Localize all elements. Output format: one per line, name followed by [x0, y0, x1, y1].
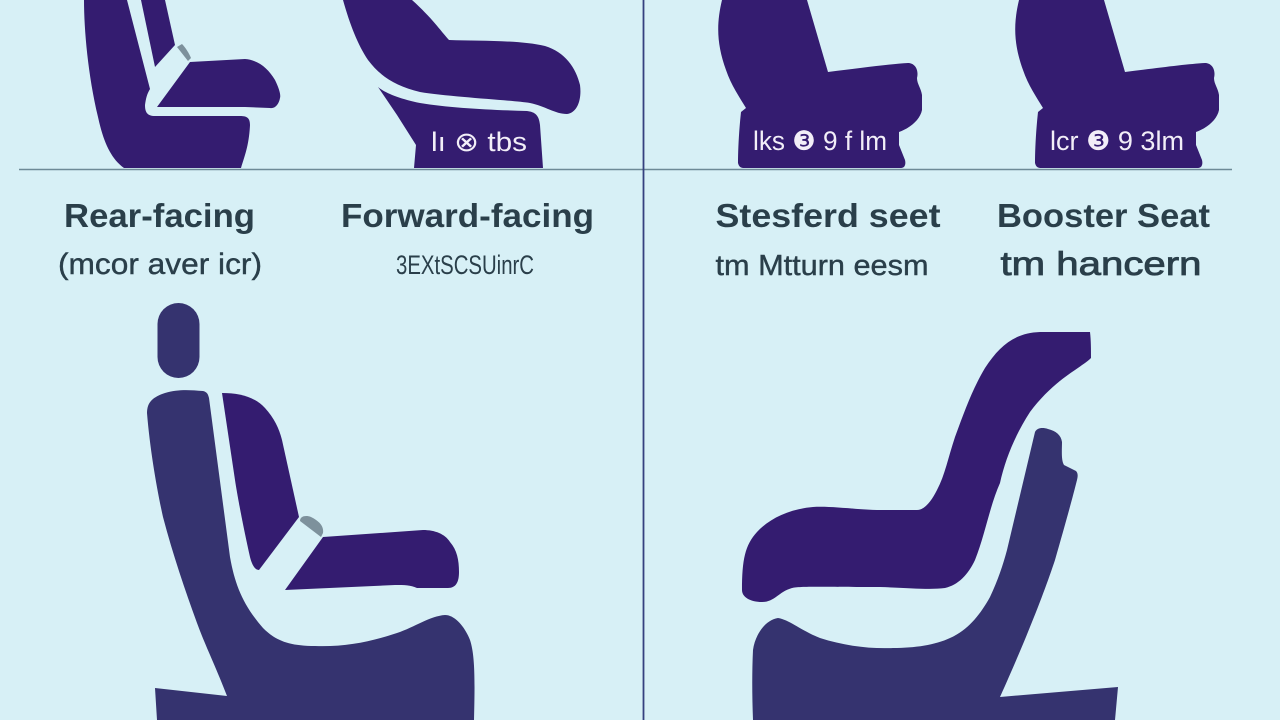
seat shell	[752, 428, 1118, 720]
caption: rear-facing: (mcor aver icr)	[58, 248, 262, 281]
caption: booster seat: tm hancern	[1000, 245, 1202, 282]
seat cushion	[285, 530, 459, 590]
icon: standard seat	[718, 0, 922, 168]
caption: standard seat: tm Mtturn eesm	[716, 250, 928, 282]
icon: booster seat	[1015, 0, 1219, 168]
buckle	[300, 516, 323, 537]
seat label: lı ⊗ tbs	[431, 127, 527, 157]
illustration: large rear-facing seat	[147, 303, 475, 720]
seat cushion and back	[742, 332, 1091, 602]
seat shell	[147, 390, 475, 720]
icon: rear-facing seat	[84, 0, 280, 168]
illustration: large forward-facing seat	[742, 332, 1118, 720]
heading: rear-facing: Rear-facing	[64, 197, 255, 234]
heading: forward-facing: Forward-facing	[341, 197, 594, 234]
seat label: lcr ❸ 9 3lm	[1050, 126, 1184, 156]
seat label: lks ❸ 9 f lm	[753, 126, 887, 156]
head rest	[158, 303, 200, 378]
icon: forward-facing seat	[343, 0, 580, 168]
heading: booster seat: Booster Seat	[997, 197, 1210, 234]
heading: standard seat: Stesferd seet	[716, 197, 941, 234]
back cushion	[222, 393, 299, 570]
caption: forward-facing: 3EXtSCSUinrC	[396, 250, 534, 280]
